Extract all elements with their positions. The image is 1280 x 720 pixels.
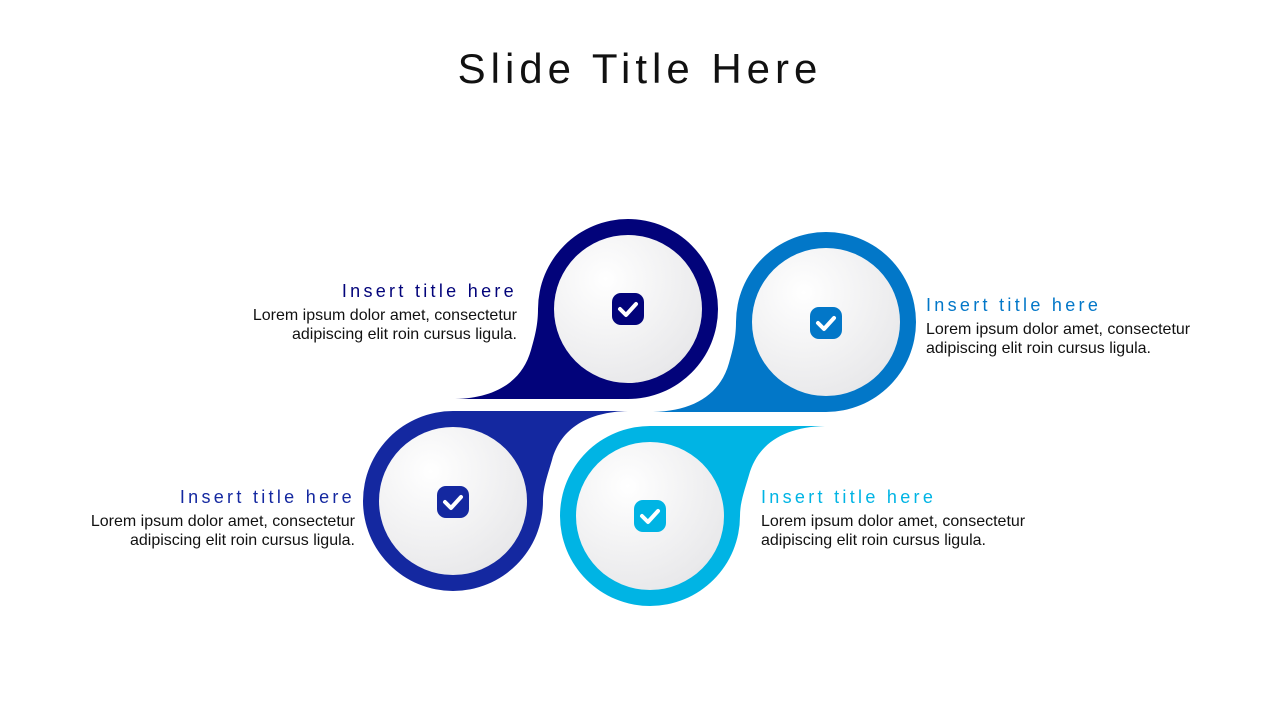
icon: check bbox=[437, 486, 469, 518]
text: top-right: Insert title here bbox=[926, 295, 1101, 315]
text: bottom-left: adipiscing elit roin cursus ligula. bbox=[130, 532, 355, 549]
icon: check bbox=[810, 307, 842, 339]
text: bottom-right bbox=[761, 487, 1025, 549]
text: bottom-right: Lorem ipsum dolor amet, consectetur bbox=[761, 513, 1025, 530]
text: bottom-left: Lorem ipsum dolor amet, consectetur bbox=[91, 513, 355, 530]
shape: top-left bbox=[455, 219, 718, 399]
text: top-right: Lorem ipsum dolor amet, consectetur bbox=[926, 321, 1190, 338]
text: top-right bbox=[926, 295, 1190, 357]
shape: bottom-right bbox=[560, 426, 825, 606]
text: bottom-left: Insert title here bbox=[180, 487, 355, 507]
icon: check bbox=[612, 293, 644, 325]
text: top-left: Insert title here bbox=[342, 281, 517, 301]
text: bottom-left bbox=[91, 487, 355, 549]
text: top-left bbox=[253, 281, 517, 343]
shape: bottom-left bbox=[363, 411, 628, 591]
title: Slide Title Here bbox=[458, 45, 822, 92]
icon: check bbox=[634, 500, 666, 532]
text: bottom-right: Insert title here bbox=[761, 487, 936, 507]
text: top-left: adipiscing elit roin cursus ligula. bbox=[292, 326, 517, 343]
text: top-right: adipiscing elit roin cursus ligula. bbox=[926, 340, 1151, 357]
text: bottom-right: adipiscing elit roin cursus ligula. bbox=[761, 532, 986, 549]
text: top-left: Lorem ipsum dolor amet, consectetur bbox=[253, 307, 517, 324]
shape: top-right bbox=[653, 232, 916, 412]
